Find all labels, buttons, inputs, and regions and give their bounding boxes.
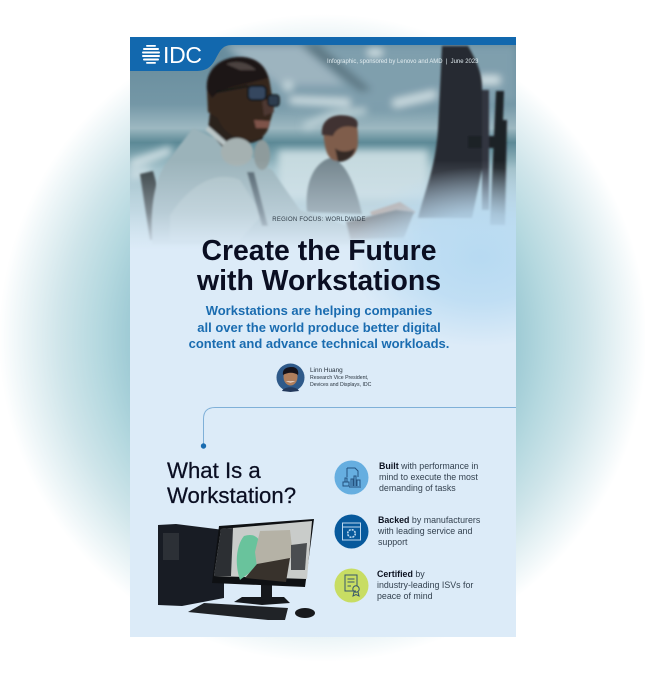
logo wordmark: IDC bbox=[163, 42, 202, 68]
section heading bbox=[167, 458, 296, 508]
subtitle: content and advance technical workloads. bbox=[189, 336, 449, 351]
feature text: Certified by bbox=[377, 569, 425, 579]
neck and head bbox=[208, 112, 268, 150]
icon: IDC globe bbox=[142, 45, 160, 64]
section heading: What Is a bbox=[167, 458, 261, 483]
feature text bbox=[379, 461, 478, 493]
feature text: mind to execute the most bbox=[379, 472, 478, 482]
keyboard bbox=[188, 603, 288, 620]
section heading: Workstation? bbox=[167, 483, 296, 508]
feature text bbox=[378, 515, 480, 547]
feature: built bbox=[334, 460, 478, 494]
feature text: Backed by manufacturers bbox=[378, 515, 480, 525]
top band bbox=[130, 37, 516, 45]
feature: certified bbox=[334, 568, 474, 602]
second person bbox=[307, 115, 416, 216]
hero photo: two people at workstations bbox=[130, 45, 516, 242]
author role: Research Vice President, bbox=[310, 375, 368, 381]
icon: browser with gear bbox=[334, 514, 368, 548]
subtitle: all over the world produce better digital bbox=[197, 320, 441, 335]
monitor bbox=[212, 519, 314, 587]
illustration: desktop workstation bbox=[158, 519, 315, 620]
mouse bbox=[295, 608, 315, 618]
author role: Devices and Displays, IDC bbox=[310, 382, 371, 388]
stand bbox=[234, 582, 290, 605]
feature text: Built with performance in bbox=[379, 461, 478, 471]
chair bbox=[140, 171, 172, 240]
main person bbox=[152, 57, 414, 245]
icon: author portrait bbox=[276, 364, 304, 392]
feature text: industry-leading ISVs for bbox=[377, 580, 473, 590]
sponsor line: Infographic, sponsored by Lenovo and AMD | June 2023 bbox=[327, 59, 478, 65]
author bbox=[276, 364, 372, 392]
title bbox=[196, 235, 441, 297]
region label: REGION FOCUS: WORLDWIDE bbox=[272, 217, 366, 223]
tower bbox=[158, 524, 224, 606]
feature text bbox=[377, 569, 474, 601]
icon: certificate bbox=[334, 568, 368, 602]
soft blue tint on right bbox=[330, 167, 516, 357]
feature text: with leading service and bbox=[378, 526, 472, 536]
subtitle: Workstations are helping companies bbox=[206, 303, 432, 318]
subtitle bbox=[189, 303, 449, 351]
logo tab bbox=[130, 42, 232, 71]
feature text: peace of mind bbox=[377, 591, 433, 601]
icon: document and charts bbox=[334, 460, 368, 494]
title: Create the Future bbox=[201, 235, 437, 267]
monitors bbox=[418, 46, 507, 225]
author name: Linn Huang bbox=[310, 367, 343, 374]
feature: backed bbox=[334, 514, 480, 548]
connector line bbox=[200, 407, 516, 449]
panel: infographic page bbox=[130, 37, 516, 637]
title: with Workstations bbox=[197, 265, 441, 297]
author role bbox=[310, 375, 372, 388]
feature text: support bbox=[378, 537, 408, 547]
feature text: demanding of tasks bbox=[379, 483, 456, 493]
